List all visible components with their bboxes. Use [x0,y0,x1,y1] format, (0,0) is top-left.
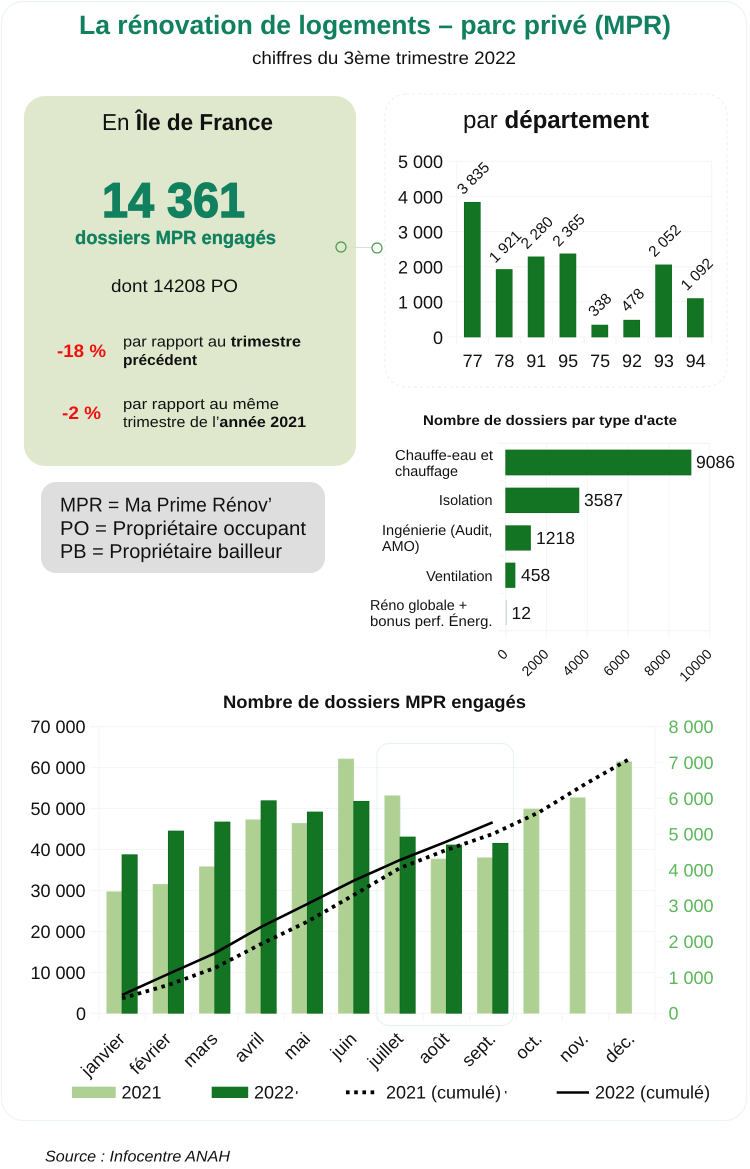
bar chart: départements: 95 [558,351,578,371]
key figure: 14 361 [102,174,245,228]
bar chart: départements: 75 [590,351,610,371]
bar chart: type d'acte: AMO) [382,539,420,555]
bar chart: départements: 1 092 [678,255,717,294]
right axis: 6 000 [668,789,714,809]
bar chart: départements: 0 [433,328,443,348]
month labels: oct. [511,1029,546,1063]
variation: trimestre: précédent [123,352,197,369]
right axis [668,717,714,1024]
highlight: 3e trimestre [377,744,514,1026]
bar chart: départements: 91 [526,351,546,371]
dont PO: dont 14208 PO [111,276,238,296]
bar chart: type d'acte: Chauffe-eau et [395,448,493,464]
right axis: 4 000 [668,860,714,880]
variation: année [62,396,306,431]
variation: trimestre: -18 % [57,341,106,361]
bar chart: départements: 5 000 [398,152,443,172]
legend: 2022 [254,1082,294,1102]
bar chart: départements: 1 921 [486,228,525,267]
bar chart: départements: 94 [686,351,706,371]
bar chart: type d'acte [370,412,735,685]
left axis: 0 [76,1004,86,1024]
bar chart: départements: 4 000 [398,188,443,208]
bar chart: type d'acte: 4000 [559,646,593,679]
left axis: 30 000 [30,881,86,901]
legend [72,1082,710,1102]
bar chart: départements: 2 052 [646,222,685,261]
bar chart: type d'acte: Ventilation [426,569,492,585]
left axis: 40 000 [30,840,86,860]
chart heading: Nombre de dossiers MPR engagés [223,692,526,712]
right axis: 0 [668,1004,679,1024]
panel: Île de France [24,96,356,466]
chart heading: Nombre de dossiers par type d'acte [423,412,677,428]
left axis: 70 000 [30,717,86,737]
legend: 2022 (cumulé) [595,1082,710,1102]
bar chart: type d'acte: 10000 [676,646,715,685]
left axis: 10 000 [30,963,86,983]
month labels: avril [230,1029,268,1066]
bar chart: départements: 3 835 [454,159,493,198]
variation: année: trimestre de l’ année 2021 [123,414,306,431]
panel: glossary: MPR = Ma Prime Rénov’ [60,494,272,516]
bar chart: départements: 2 365 [550,211,589,250]
legend: 2021 (cumulé) [386,1082,501,1102]
bar chart: départements: 2 000 [398,258,443,278]
bar chart: type d'acte: 6000 [600,646,633,679]
left axis: 60 000 [30,758,86,778]
panel: glossary [41,482,325,573]
key figure label: dossiers MPR engagés [75,228,276,249]
bar chart: départements: 77 [463,351,483,371]
month labels: mars [179,1029,222,1071]
bar chart: départements: 3 000 [398,222,443,242]
right axis: 7 000 [668,753,714,773]
left axis: 20 000 [30,922,86,942]
month labels: sept. [458,1029,500,1070]
month labels: juin [326,1029,361,1063]
month labels: février [126,1029,175,1078]
bar chart: type d'acte: 9086 [696,452,735,472]
variation: trimestre [57,334,301,369]
bar chart: départements: 92 [622,351,642,371]
bars 2022 [122,801,508,1013]
title: La rénovation de logements – parc privé (MPR) [79,10,671,40]
variation: année: -2 % [62,403,101,423]
panel: glossary: PO = Propriétaire occupant [60,518,306,540]
bar chart: départements: 93 [654,351,674,371]
bar chart: type d'acte: bonus perf. Énerg. [370,613,492,630]
bar chart: type d'acte: 458 [521,565,550,585]
right axis: 2 000 [668,932,714,952]
bar chart: type d'acte: Isolation [439,493,492,509]
source: Source : Infocentre ANAH [45,1148,231,1166]
bar chart: type d'acte: 3587 [584,490,623,510]
bar chart: type d'acte: Réno globale + [370,598,467,614]
right axis: 8 000 [668,717,714,737]
bar chart: type d'acte: 12 [512,603,531,623]
month labels: nov. [555,1029,592,1066]
panel heading: par département [463,107,649,134]
left axis: 50 000 [30,799,86,819]
bar chart: départements: 78 [494,351,514,371]
legend: 2021 [122,1082,162,1102]
month labels: déc. [600,1029,639,1067]
right axis: 3 000 [668,896,714,916]
bar chart: type d'acte: Ingénierie (Audit, [382,523,492,539]
bar chart: départements: 2 280 [518,214,557,253]
right axis: 5 000 [668,824,714,844]
bar chart: type d'acte: 2000 [518,646,552,679]
bar chart: type d'acte: 0 [494,646,511,663]
combo chart: dossiers MPR engagés [30,692,714,1102]
bars 2021 [107,759,632,1013]
line: 2022 cumulé [122,822,493,995]
panel: glossary: PB = Propriétaire bailleur [60,541,282,563]
month labels: août [414,1029,453,1068]
panel: par département [385,94,727,387]
right axis: 1 000 [668,968,714,988]
connector [336,242,382,253]
variation: trimestre: par rapport au trimestre [123,334,301,350]
bar chart: type d'acte: 8000 [641,646,674,679]
month labels: janvier [76,1029,129,1081]
panel heading: En Île de France [102,109,273,135]
bar chart: départements: 338 [585,290,615,320]
variation: année: par rapport au même [123,396,279,413]
month labels: juillet [363,1029,407,1073]
month labels: mai [279,1029,314,1063]
left axis [30,717,86,1024]
bar chart: départements: 478 [618,285,648,315]
line: 2021 cumulé [122,758,632,998]
bar chart: départements [398,152,717,371]
month labels [76,1029,639,1081]
subtitle: chiffres du 3ème trimestre 2022 [252,48,516,68]
bar chart: type d'acte: 1218 [536,528,575,548]
bar chart: départements: 1 000 [398,292,443,312]
bar chart: type d'acte: chauffage [395,464,458,480]
